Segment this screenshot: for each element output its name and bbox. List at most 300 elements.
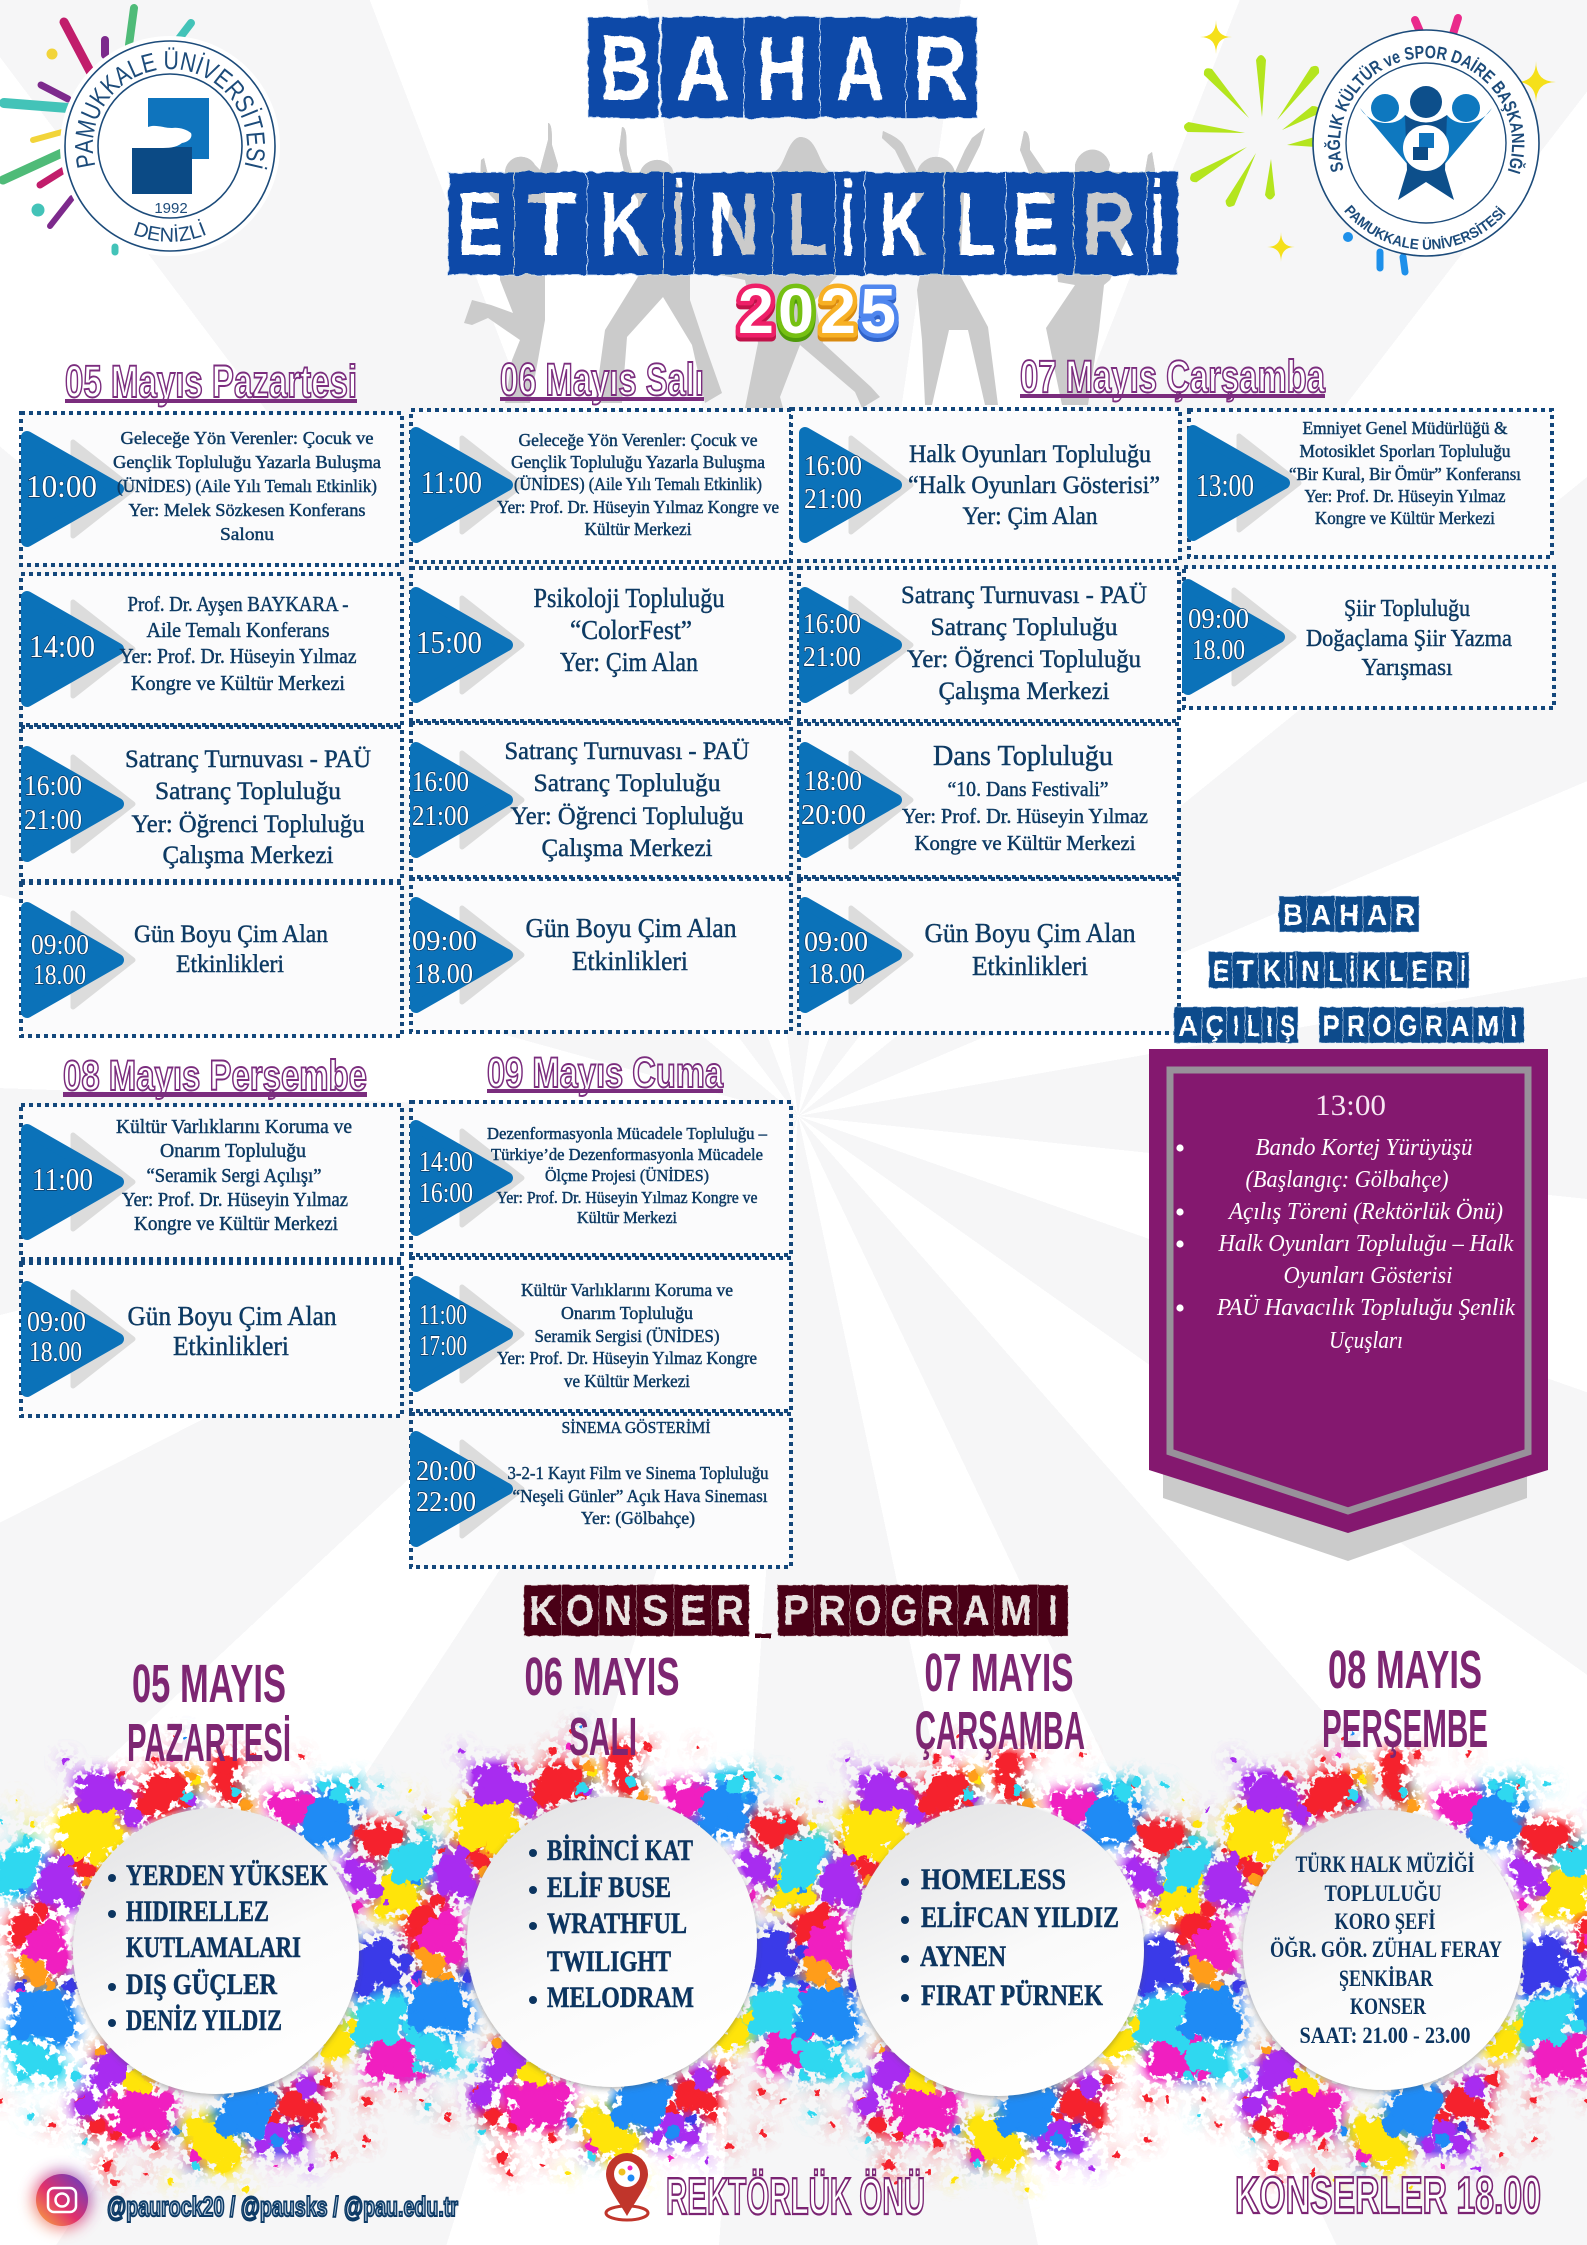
title: ETKİNLİKLERİ: T bbox=[526, 175, 577, 275]
heading: 08 Mayıs Perşembe concert bbox=[1322, 1640, 1488, 1759]
location: Rektörlük Önü: REKTÖRLÜK ÖNÜ bbox=[666, 2168, 925, 2226]
panel: 07 Mayıs satranç event bbox=[799, 568, 1179, 721]
heading: Bahar Etkinlikleri Açılış Programı: L bbox=[1328, 955, 1342, 988]
event text: “Neşeli Günler” Açık Hava Sineması bbox=[512, 1486, 768, 1506]
heading: Konser Programı bbox=[524, 1585, 1068, 1638]
event text: Kültür Varlıklarını Koruma ve bbox=[521, 1280, 733, 1300]
time badge: 21:00 bbox=[24, 804, 82, 836]
title: ETKİNLİKLERİ: N bbox=[708, 175, 759, 275]
time badge bbox=[1193, 431, 1299, 535]
heading: Bahar Etkinlikleri Açılış Programı: K bbox=[1362, 955, 1381, 988]
time badge: 09:00 bbox=[804, 926, 868, 958]
event text: Onarım Topluluğu bbox=[561, 1303, 693, 1323]
heading: Bahar Etkinlikleri Açılış Programı: A bbox=[1367, 899, 1387, 932]
event text bbox=[113, 428, 381, 544]
year 2025: 0 bbox=[778, 279, 814, 351]
year 2025: 2 bbox=[820, 279, 856, 351]
opening list: Açılış Töreni (Rektörlük Önü) bbox=[1227, 1199, 1503, 1225]
dancing silhouettes over letters bbox=[480, 123, 1155, 275]
event text: Seramik Sergisi (ÜNİDES) bbox=[534, 1326, 720, 1347]
time badge bbox=[416, 433, 522, 537]
time badge: 21:00 bbox=[804, 483, 862, 515]
event text: Geleceğe Yön Verenler: Çocuk ve bbox=[120, 428, 374, 448]
event text: Satranç Topluluğu bbox=[155, 778, 341, 805]
left logo: Pamukkale Üniversitesi bbox=[0, 4, 280, 256]
event text: (ÜNİDES) (Aile Yılı Temalı Etkinlik) bbox=[514, 474, 762, 495]
time badge: 16:00 bbox=[803, 608, 861, 640]
heading: 05 Mayıs Pazartesi concert bbox=[127, 1654, 291, 1773]
event text: Satranç Turnuvası - PAÜ bbox=[504, 738, 750, 765]
panel: 06 Mayıs satranç event bbox=[411, 723, 791, 877]
event text: Yer: Prof. Dr. Hüseyin Yılmaz bbox=[122, 1190, 348, 1211]
event text bbox=[908, 441, 1160, 530]
event text: Kültür Merkezi bbox=[577, 1208, 677, 1227]
event text: “Seramik Sergi Açılışı” bbox=[146, 1166, 322, 1187]
heading: Bahar Etkinlikleri Açılış Programı: İ bbox=[1350, 955, 1354, 988]
artist list: MELODRAM bbox=[547, 1981, 694, 2014]
panel: 05 Mayıs 10:00 event bbox=[21, 413, 402, 565]
event text: SİNEMA GÖSTERİMİ bbox=[562, 1418, 711, 1437]
heading: 05 Mayıs Pazartesi: 05 Mayıs Pazartesi bbox=[65, 356, 357, 407]
event text: Gün Boyu Çim Alan bbox=[134, 921, 328, 948]
heading: Bahar Etkinlikleri Açılış Programı: H bbox=[1339, 899, 1359, 932]
choir text: KONSER bbox=[1350, 1994, 1426, 2019]
event text: 3-2-1 Kayıt Film ve Sinema Topluluğu bbox=[508, 1463, 768, 1483]
event text: Gün Boyu Çim Alan bbox=[924, 918, 1136, 948]
icon: location pin bbox=[606, 2153, 648, 2220]
opening list: PAÜ Havacılık Topluluğu Şenlik bbox=[1216, 1295, 1515, 1321]
artist list: KUTLAMALARI bbox=[126, 1931, 301, 1964]
time badge: 11:00 bbox=[421, 464, 482, 500]
event text: Yer: Prof. Dr. Hüseyin Yılmaz bbox=[120, 644, 356, 668]
event text bbox=[125, 746, 371, 869]
panel: concert circle 08 Mayıs bbox=[1243, 1810, 1523, 2090]
heading: Bahar Etkinlikleri Açılış Programı: Ş bbox=[1280, 1010, 1295, 1043]
time badge bbox=[27, 1130, 133, 1234]
right logo: Sağlık Kültür ve Spor Daire Başkanlığı: SAĞLIK KÜLTÜR ve SPOR DAİRE BAŞKANLIĞI bbox=[1324, 46, 1526, 174]
time badge: 18.00 bbox=[808, 958, 865, 990]
heading: Bahar Etkinlikleri Açılış Programı: N bbox=[1302, 955, 1320, 988]
heading: Konser Programı: M bbox=[1000, 1587, 1032, 1635]
title: ETKİNLİKLERİ: K bbox=[879, 175, 927, 275]
heading: Konser Programı: I bbox=[1048, 1587, 1058, 1635]
title: BAHAR: R bbox=[913, 18, 968, 120]
event text: Satranç Turnuvası - PAÜ bbox=[125, 746, 371, 773]
time badge: 17:00 bbox=[419, 1330, 467, 1362]
opening list: Oyunları Gösterisi bbox=[1284, 1263, 1452, 1289]
title: ETKİNLİKLERİ: İ bbox=[1151, 175, 1164, 275]
time badge bbox=[26, 437, 133, 541]
event text bbox=[116, 1117, 352, 1235]
panel: concert circle 05 Mayıs bbox=[73, 1808, 359, 2094]
heading: 06 Mayıs Salı concert: 06 MAYIS bbox=[524, 1647, 680, 1707]
icon: lime firework bbox=[1184, 55, 1319, 207]
event text bbox=[134, 921, 328, 978]
heading: Konser Programı: N bbox=[604, 1587, 632, 1635]
title: BAHAR: A bbox=[835, 18, 885, 120]
event text bbox=[1289, 418, 1521, 528]
artist list: DIŞ GÜÇLER bbox=[126, 1968, 277, 2001]
time badge: 10:00 bbox=[26, 468, 97, 504]
time badge: 18.00 bbox=[33, 959, 86, 991]
year 2025: 5 bbox=[860, 279, 896, 351]
event text: Halk Oyunları Topluluğu bbox=[909, 441, 1151, 468]
panel: 09 Mayıs sinema gösterimi bbox=[411, 1414, 791, 1567]
event text: Prof. Dr. Ayşen BAYKARA - bbox=[128, 592, 348, 616]
time badge: 16:00 bbox=[24, 770, 82, 802]
time badge: 18:00 bbox=[804, 765, 862, 797]
event text: Satranç Topluluğu bbox=[534, 770, 721, 797]
time badge bbox=[27, 908, 133, 1012]
event text: Ölçme Projesi (ÜNİDES) bbox=[545, 1166, 709, 1185]
event text: Çalışma Merkezi bbox=[162, 842, 334, 869]
event text: Yer: Prof. Dr. Hüseyin Yılmaz bbox=[1304, 486, 1506, 506]
heading: Bahar Etkinlikleri Açılış Programı: İ bbox=[1288, 955, 1294, 988]
event text: Yer: Prof. Dr. Hüseyin Yılmaz bbox=[902, 804, 1148, 828]
heading: Konser Programı: R bbox=[818, 1587, 846, 1635]
panel: 09 Mayıs seramik sergisi bbox=[411, 1258, 791, 1411]
event text bbox=[526, 913, 737, 976]
heading: Bahar Etkinlikleri Açılış Programı: İ bbox=[1460, 955, 1466, 988]
event text: Dezenformasyonla Mücadele Topluluğu – bbox=[487, 1124, 768, 1143]
event text: Onarım Topluluğu bbox=[160, 1141, 306, 1162]
event text: “Halk Oyunları Gösterisi” bbox=[908, 472, 1160, 499]
year 2025 bbox=[738, 275, 896, 351]
event text bbox=[487, 1124, 768, 1227]
time badge bbox=[804, 433, 911, 537]
event text: Kültür Varlıklarını Koruma ve bbox=[116, 1117, 352, 1138]
heading: Konser Programı: A bbox=[962, 1587, 990, 1635]
time badge: 18.00 bbox=[1192, 634, 1245, 666]
heading: Bahar Etkinlikleri Açılış Programı: E bbox=[1213, 955, 1229, 988]
heading: Bahar Etkinlikleri Açılış Programı: A bbox=[1311, 899, 1331, 932]
artist list: ELİFCAN YILDIZ bbox=[921, 1901, 1119, 1934]
time badge: 09:00 bbox=[31, 929, 89, 961]
artist list: FIRAT PÜRNEK bbox=[921, 1979, 1104, 2012]
event text: Emniyet Genel Müdürlüğü & bbox=[1302, 418, 1508, 438]
heading: Bahar Etkinlikleri Açılış Programı: G bbox=[1399, 1010, 1417, 1043]
artist list: TWILIGHT bbox=[547, 1945, 671, 1978]
panel: 07 Mayıs şiir yarışması bbox=[1184, 567, 1554, 708]
heading: Konser Programı: P bbox=[783, 1587, 809, 1635]
title: BAHAR: H bbox=[757, 18, 807, 120]
panel: 06 Mayıs çim alan bbox=[411, 879, 791, 1032]
choir text: TÜRK HALK MÜZİĞİ bbox=[1296, 1851, 1475, 1877]
panel: 07 Mayıs dans festivali bbox=[799, 724, 1179, 877]
heading: 09 Mayıs Cuma: 09 Mayıs Cuma bbox=[487, 1049, 724, 1097]
artist list: AYNEN bbox=[920, 1940, 1006, 1973]
event text: Gençlik Topluluğu Yazarla Buluşma bbox=[113, 452, 381, 472]
time badge bbox=[416, 1282, 522, 1386]
choir text: ÖĞR. GÖR. ZÜHAL FERAY bbox=[1270, 1936, 1502, 1962]
heading: Bahar Etkinlikleri Açılış Programı: A bbox=[1178, 1010, 1198, 1043]
heading: Bahar Etkinlikleri Açılış Programı: E bbox=[1412, 955, 1428, 988]
panel: 06 Mayıs 11:00 event bbox=[411, 410, 791, 562]
choir text: SAAT: 21.00 - 23.00 bbox=[1300, 2023, 1470, 2048]
heading: 07 Mayıs Çarşamba: 07 Mayıs Çarşamba bbox=[1020, 351, 1326, 402]
heading: Bahar Etkinlikleri Açılış Programı: I bbox=[1510, 1010, 1516, 1043]
icon: yellow sparkle stars bbox=[1200, 20, 1556, 262]
time badge: 14:00 bbox=[29, 628, 95, 664]
time badge bbox=[1188, 585, 1294, 689]
event text bbox=[128, 1301, 337, 1361]
event text: “Bir Kural, Bir Ömür” Konferansı bbox=[1289, 464, 1521, 484]
paint splatter rings bbox=[0, 1725, 1587, 2192]
event text: Aile Temalı Konferans bbox=[146, 618, 330, 642]
artist list bbox=[529, 1834, 694, 2014]
event text: Psikoloji Topluluğu bbox=[534, 583, 725, 613]
event text: Yer: (Gölbahçe) bbox=[581, 1508, 695, 1529]
left logo: Pamukkale Üniversitesi: PAMUKKALE ÜNİVERSİTESİ bbox=[75, 47, 268, 170]
event text: Motosiklet Sporları Topluluğu bbox=[1300, 441, 1511, 461]
heading: Bahar Etkinlikleri Açılış Programı: B bbox=[1283, 899, 1303, 932]
time badge: 21:00 bbox=[412, 800, 469, 832]
panel: 09 Mayıs dezenformasyon bbox=[411, 1102, 791, 1255]
heading: 05 Mayıs Pazartesi concert: PAZARTESİ bbox=[127, 1713, 291, 1773]
heading: Konser Programı: K bbox=[529, 1587, 557, 1635]
panel: 08 Mayıs seramik sergi bbox=[21, 1105, 402, 1259]
panel: concert circle 07 Mayıs bbox=[852, 1804, 1144, 2096]
event text: Etkinlikleri bbox=[176, 951, 284, 978]
year 2025: 2 bbox=[738, 275, 774, 347]
time badge bbox=[412, 748, 522, 852]
time badge: 11:00 bbox=[32, 1161, 93, 1197]
heading: Bahar Etkinlikleri Açılış Programı: I bbox=[1266, 1010, 1272, 1043]
event text: Çalışma Merkezi bbox=[938, 678, 1110, 705]
heading: Konser Programı: R bbox=[716, 1587, 744, 1635]
time badge bbox=[24, 752, 133, 856]
title: BAHAR bbox=[588, 17, 977, 120]
year 2025: 0 bbox=[778, 275, 814, 347]
heading: 07 Mayıs Çarşamba concert: 07 MAYIS bbox=[924, 1643, 1074, 1703]
heading: Konser Programı: O bbox=[854, 1587, 882, 1635]
right logo: Sağlık Kültür ve Spor Daire Başkanlığı bbox=[1312, 14, 1540, 276]
right logo: Sağlık Kültür ve Spor Daire Başkanlığı: PAMUKKALE ÜNİVERSİTESİ bbox=[1344, 204, 1506, 250]
event text: Yer: Çim Alan bbox=[560, 647, 698, 677]
artist list: YERDEN YÜKSEK bbox=[126, 1859, 329, 1892]
title: ETKİNLİKLERİ: E bbox=[457, 175, 503, 275]
heading: Bahar Etkinlikleri Açılış Programı: L bbox=[1247, 1010, 1260, 1043]
heading: Bahar Etkinlikleri Açılış Programı: L bbox=[1390, 955, 1404, 988]
panel: 05 Mayıs satranç event bbox=[21, 727, 402, 881]
heading: 05 Mayıs Pazartesi concert: 05 MAYIS bbox=[132, 1654, 286, 1714]
event text bbox=[497, 1280, 757, 1391]
panel: 07 Mayıs halk oyunları bbox=[791, 409, 1180, 561]
panel: 07 Mayıs çim alan bbox=[799, 879, 1179, 1033]
title: ETKİNLİKLERİ: L bbox=[788, 175, 827, 275]
time badge: 09:00 bbox=[1188, 603, 1249, 635]
time badge: 18.00 bbox=[29, 1336, 82, 1368]
time badge: 16:00 bbox=[412, 766, 469, 798]
heading: 06 Mayıs Salı concert bbox=[524, 1647, 680, 1767]
event text: Kültür Merkezi bbox=[584, 519, 692, 539]
event text bbox=[1306, 596, 1512, 681]
dancing silhouettes bbox=[464, 123, 1155, 408]
event text: Yer: Öğrenci Topluluğu bbox=[907, 646, 1141, 673]
opening list: (Başlangıç: Gölbahçe) bbox=[1246, 1167, 1448, 1193]
heading: 06 Mayıs Salı: 06 Mayıs Salı bbox=[500, 354, 704, 405]
artist list bbox=[108, 1859, 329, 2037]
artist list: BİRİNCİ KAT bbox=[547, 1834, 693, 1867]
time badge bbox=[27, 597, 133, 701]
time badge bbox=[803, 593, 911, 697]
time badge bbox=[801, 748, 911, 852]
event text: Satranç Turnuvası - PAÜ bbox=[901, 582, 1147, 609]
event text: Gün Boyu Çim Alan bbox=[526, 913, 737, 943]
panel: opening programme shield bbox=[1149, 1049, 1548, 1561]
heading: 08 Mayıs Perşembe concert: 08 MAYIS bbox=[1328, 1640, 1482, 1700]
opening list: Uçuşları bbox=[1329, 1328, 1403, 1354]
event text: Yer: Prof. Dr. Hüseyin Yılmaz Kongre ve bbox=[496, 1188, 758, 1207]
time badge: 13:00 bbox=[1196, 467, 1254, 503]
title: ETKİNLİKLERİ: L bbox=[956, 175, 995, 275]
event text: Şiir Topluluğu bbox=[1344, 596, 1470, 622]
title: BAHAR: A bbox=[676, 18, 730, 120]
left logo: Pamukkale Üniversitesi: DENİZLİ bbox=[134, 218, 206, 242]
panel: 05 Mayıs 14:00 event bbox=[21, 574, 402, 725]
event text: (ÜNİDES) (Aile Yılı Temalı Etkinlik) bbox=[117, 476, 377, 497]
time badge bbox=[416, 1126, 522, 1230]
social handles: @paurock20 / @pausks / @pau.edu.tr bbox=[107, 2191, 458, 2222]
heading: Bahar Etkinlikleri Açılış Programı: M bbox=[1477, 1010, 1499, 1043]
panel: 05 Mayıs çim alan bbox=[21, 883, 402, 1036]
event text: Gençlik Topluluğu Yazarla Buluşma bbox=[511, 452, 765, 472]
event text: Etkinlikleri bbox=[972, 951, 1088, 981]
heading: 06 Mayıs Salı concert: SALI bbox=[569, 1707, 637, 1767]
icon: instagram bbox=[32, 2170, 92, 2230]
event text: Etkinlikleri bbox=[572, 946, 688, 976]
opening list: Halk Oyunları Topluluğu – Halk bbox=[1218, 1231, 1514, 1257]
panel: 08 Mayıs çim alan bbox=[21, 1263, 402, 1416]
title: ETKİNLİKLERİ bbox=[448, 172, 1178, 275]
artist list: HIDIRELLEZ bbox=[126, 1895, 269, 1928]
event text: Dans Topluluğu bbox=[933, 740, 1113, 772]
event text bbox=[902, 740, 1148, 855]
event text bbox=[901, 582, 1147, 705]
event text: Kongre ve Kültür Merkezi bbox=[131, 671, 345, 695]
opening list: Bando Kortej Yürüyüşü bbox=[1256, 1135, 1472, 1161]
event text: Yer: Prof. Dr. Hüseyin Yılmaz Kongre bbox=[497, 1348, 757, 1368]
event text: “10. Dans Festivali” bbox=[948, 777, 1108, 801]
heading: Konser Programı: E bbox=[680, 1587, 706, 1635]
panel: concert circle 06 Mayıs bbox=[467, 1797, 757, 2087]
title: BAHAR: B bbox=[600, 18, 651, 120]
time badge bbox=[416, 1437, 522, 1541]
year 2025: 5 bbox=[860, 275, 896, 347]
time badge: 18.00 bbox=[414, 958, 473, 990]
left logo: Pamukkale Üniversitesi: 1992 bbox=[154, 200, 188, 217]
event text: Türkiye’de Dezenformasyonla Mücadele bbox=[491, 1145, 763, 1164]
title: ETKİNLİKLERİ: İ bbox=[841, 175, 854, 275]
heading: Konser Programı: S bbox=[642, 1587, 668, 1635]
heading: Bahar Etkinlikleri Açılış Programı: I bbox=[1233, 1010, 1239, 1043]
time badge: 15:00 bbox=[416, 624, 482, 660]
panel: 06 Mayıs ColorFest bbox=[411, 568, 791, 721]
choir text: ŞENKİBAR bbox=[1339, 1966, 1433, 1991]
artist list: WRATHFUL bbox=[547, 1907, 687, 1940]
opening time: 13:00 bbox=[1315, 1089, 1386, 1122]
heading: Bahar Etkinlikleri Açılış Programı: O bbox=[1372, 1010, 1392, 1043]
time badge: 09:00 bbox=[27, 1306, 86, 1338]
event text: Çalışma Merkezi bbox=[542, 835, 713, 862]
time badge: 09:00 bbox=[412, 925, 477, 957]
heading: Bahar Etkinlikleri Açılış Programı: R bbox=[1436, 955, 1454, 988]
event text: Salonu bbox=[220, 524, 274, 544]
heading: Bahar Etkinlikleri Açılış Programı: R bbox=[1425, 1010, 1443, 1043]
artist list bbox=[901, 1863, 1119, 2012]
event text: Satranç Topluluğu bbox=[930, 614, 1118, 641]
event text: Kongre ve Kültür Merkezi bbox=[914, 831, 1136, 855]
event text bbox=[120, 592, 356, 695]
artist list: HOMELESS bbox=[921, 1863, 1066, 1896]
time badge: 20:00 bbox=[416, 1455, 476, 1487]
title: ETKİNLİKLERİ: K bbox=[599, 175, 650, 275]
heading: Bahar Etkinlikleri Açılış Programı: K bbox=[1263, 955, 1281, 988]
event text: Kongre ve Kültür Merkezi bbox=[1315, 508, 1495, 528]
artist list: DENİZ YILDIZ bbox=[126, 2004, 282, 2037]
time badge: 21:00 bbox=[803, 641, 861, 673]
heading: Bahar Etkinlikleri Açılış Programı: R bbox=[1395, 899, 1415, 932]
event text bbox=[508, 1418, 768, 1529]
choir text bbox=[1270, 1851, 1502, 2048]
heading: Konser Programı: R bbox=[926, 1587, 954, 1635]
heading: 07 Mayıs Çarşamba concert bbox=[915, 1643, 1085, 1761]
heading: 07 Mayıs Çarşamba concert: ÇARŞAMBA bbox=[915, 1701, 1085, 1761]
time badge: 11:00 bbox=[419, 1299, 467, 1331]
event text: Yer: Çim Alan bbox=[962, 503, 1098, 530]
time badge bbox=[27, 1287, 133, 1391]
event text bbox=[504, 738, 750, 862]
event text: Gün Boyu Çim Alan bbox=[128, 1301, 337, 1331]
heading: Bahar Etkinlikleri Açılış Programı: Ç bbox=[1206, 1010, 1224, 1043]
artist list: ELİF BUSE bbox=[547, 1871, 671, 1904]
heading: 08 Mayıs Perşembe: 08 Mayıs Perşembe bbox=[63, 1052, 367, 1100]
event text: “ColorFest” bbox=[570, 615, 692, 645]
event text bbox=[924, 918, 1136, 981]
time badge: 14:00 bbox=[419, 1146, 473, 1178]
time badge: 16:00 bbox=[419, 1177, 473, 1209]
time badge: 20:00 bbox=[801, 799, 866, 831]
event text: Kongre ve Kültür Merkezi bbox=[134, 1214, 339, 1235]
event text bbox=[534, 583, 725, 677]
heading: Bahar Etkinlikleri Açılış Programı: A bbox=[1450, 1010, 1470, 1043]
event text: Yer: Prof. Dr. Hüseyin Yılmaz Kongre ve bbox=[497, 497, 779, 517]
heading: Konser Programı: O bbox=[566, 1587, 594, 1635]
heading: Konser Programı: G bbox=[890, 1587, 918, 1635]
time badge: 16:00 bbox=[804, 450, 862, 482]
event text bbox=[497, 430, 779, 539]
time badge bbox=[416, 593, 522, 697]
panel: 07 Mayıs emniyet konferansı bbox=[1189, 410, 1552, 557]
event text: Yer: Öğrenci Topluluğu bbox=[510, 803, 744, 830]
title: ETKİNLİKLERİ: R bbox=[1082, 175, 1135, 275]
event text: Yarışması bbox=[1362, 655, 1453, 681]
event text: Geleceğe Yön Verenler: Çocuk ve bbox=[518, 430, 758, 450]
title: ETKİNLİKLERİ: E bbox=[1012, 175, 1058, 275]
year 2025: 2 bbox=[738, 279, 774, 351]
heading: Bahar Etkinlikleri Açılış Programı: R bbox=[1347, 1010, 1365, 1043]
heading: Bahar Etkinlikleri Açılış Programı: T bbox=[1236, 955, 1254, 988]
heading: Bahar Etkinlikleri Açılış Programı bbox=[1174, 896, 1524, 1043]
title: ETKİNLİKLERİ: İ bbox=[672, 175, 685, 275]
choir text: KORO ŞEFİ bbox=[1334, 1909, 1436, 1934]
icon: confetti rays bbox=[3, 8, 191, 252]
year 2025: 2 bbox=[820, 275, 856, 347]
heading: Bahar Etkinlikleri Açılış Programı: P bbox=[1322, 1010, 1340, 1043]
time badge bbox=[804, 903, 911, 1007]
event text: Etkinlikleri bbox=[173, 1331, 289, 1361]
event text: Yer: Melek Sözkesen Konferans bbox=[128, 500, 366, 520]
